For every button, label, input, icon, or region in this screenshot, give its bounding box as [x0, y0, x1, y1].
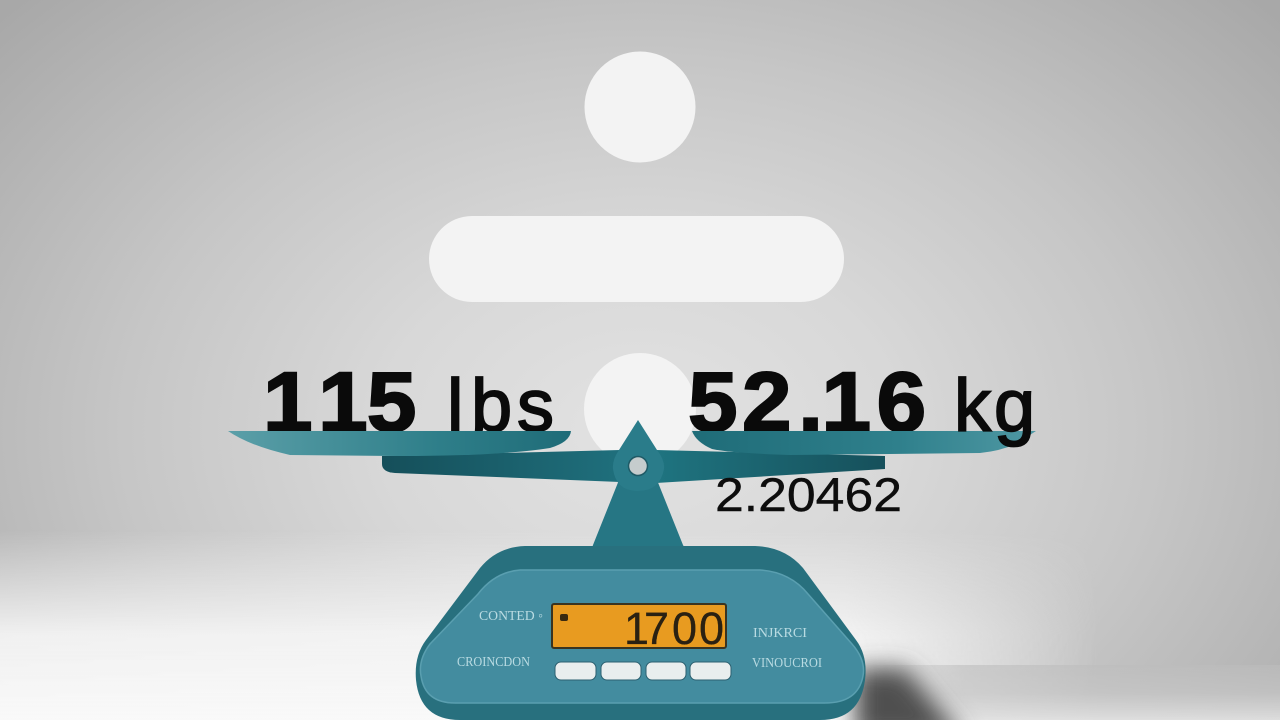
division bar [429, 216, 844, 302]
display reading: 1700 [624, 603, 724, 654]
balance beam and pans [228, 420, 1036, 554]
scale body [416, 546, 866, 720]
display indicator [560, 614, 568, 621]
division symbol [429, 52, 844, 465]
scale labels: VINOUCROI [752, 656, 822, 671]
display [552, 604, 726, 648]
value: 52.16: 52.16 [688, 356, 926, 449]
scale labels: CONTED ◦ [479, 609, 543, 624]
value: kg: kg [954, 364, 1035, 447]
value: 115 lbs: 115 [263, 356, 416, 449]
pivot screw [628, 456, 648, 476]
left beam arm [382, 450, 620, 482]
buttons [555, 662, 731, 680]
value: 115 lbs [263, 356, 554, 449]
stand [590, 480, 688, 554]
value: 115 lbs: lbs [447, 364, 554, 447]
scale labels [457, 609, 822, 671]
right pan [692, 431, 1036, 455]
left pan [228, 431, 571, 456]
front face [420, 570, 864, 703]
pivot [613, 420, 664, 491]
scale labels: INJKRCI [753, 626, 807, 641]
rear body [416, 546, 866, 720]
bottom dot [584, 353, 696, 465]
scale labels: CROINCDON [457, 655, 530, 670]
top dot [584, 52, 696, 162]
right beam arm [656, 450, 885, 483]
conversion factor: 2.20462 [715, 468, 902, 521]
